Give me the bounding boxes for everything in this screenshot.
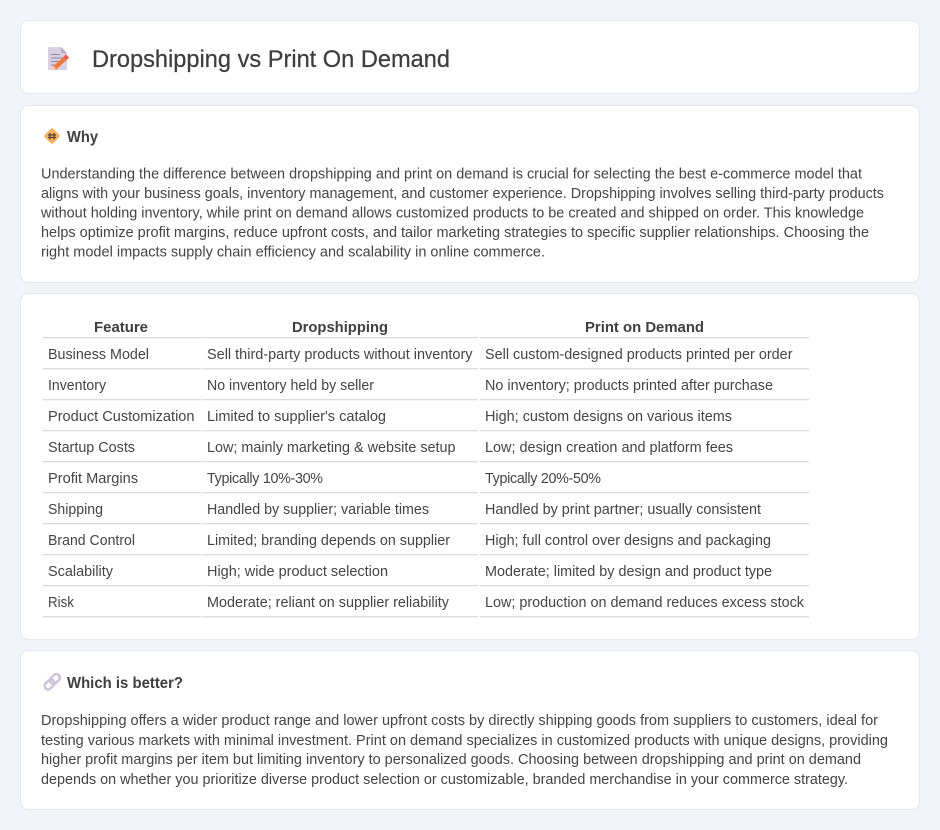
table header row: Dropshipping	[292, 319, 388, 336]
row: risk: Moderate; reliant on supplier reliability	[207, 595, 450, 611]
row: risk: Low; production on demand reduces excess stock	[485, 595, 805, 611]
row: scalability: Moderate; limited by design and product type	[485, 564, 772, 580]
row: brand control	[48, 533, 771, 549]
row: business model: Business Model	[48, 347, 149, 363]
text block: which paragraph: higher profit margins per item but limiting inventory to personalized goods. Choosing between dropshipping and print on demand	[41, 752, 861, 768]
row: scalability: Scalability	[48, 564, 114, 580]
text block: which paragraph: testing various markets with minimal investment. Print on demand specializes in customized products with unique designs, providing	[41, 733, 888, 749]
table header row: Feature	[94, 319, 148, 336]
icon: chain link	[43, 673, 61, 691]
row: product customization	[48, 409, 732, 425]
row: inventory: No inventory; products printed after purchase	[485, 378, 773, 394]
row: startup costs: Startup Costs	[48, 440, 135, 456]
row: profit margins	[48, 471, 601, 487]
text block: why paragraph: Understanding the difference between dropshipping and print on demand is crucial for selecting the best e-commerce model that	[41, 166, 862, 182]
table header row: Print on Demand	[585, 319, 704, 336]
title: Dropshipping vs Print On Demand	[92, 46, 450, 73]
text block: why paragraph: helps optimize profit margins, reduce upfront costs, and tailor marketing strategies to specific supplier relationships. Choosing the	[41, 225, 869, 241]
heading: which is better: Which is better?	[67, 675, 183, 692]
row: shipping	[48, 502, 761, 518]
row: scalability: High; wide product selection	[207, 564, 388, 580]
panel: why	[20, 106, 920, 282]
row: shipping: Handled by print partner; usually consistent	[485, 502, 761, 518]
text block: which paragraph	[41, 713, 888, 788]
icon: document with pencil	[48, 47, 68, 70]
text block: why paragraph: right model impacts supply chain efficiency and scalability in online commerce.	[41, 244, 545, 260]
panel: comparison table	[20, 294, 920, 640]
row: profit margins: Profit Margins	[48, 471, 138, 487]
row: shipping: Handled by supplier; variable times	[207, 502, 429, 518]
table header row	[94, 319, 704, 336]
text block: why paragraph	[40, 166, 884, 260]
row: inventory	[48, 378, 773, 394]
row: brand control: High; full control over designs and packaging	[485, 533, 771, 549]
row: brand control: Brand Control	[48, 533, 135, 549]
row: inventory: Inventory	[48, 378, 107, 394]
text block: which paragraph: depends on whether you prioritize diverse product selection or customizable, branded merchandise in your commerce strategy.	[41, 772, 848, 788]
row: inventory: No inventory held by seller	[207, 378, 374, 394]
text block: why paragraph: without holding inventory, while print on demand allows customized products to be created and shipped on order. This knowledge	[40, 206, 864, 222]
row: product customization: High; custom designs on various items	[485, 409, 732, 425]
row: scalability	[48, 564, 772, 580]
row: startup costs	[48, 440, 733, 456]
row: startup costs: Low; mainly marketing & website setup	[207, 440, 456, 456]
row: risk: Risk	[48, 595, 75, 611]
row: shipping: Shipping	[48, 502, 103, 518]
icon: road sign diamond	[44, 128, 60, 144]
row: business model	[48, 347, 793, 363]
row: profit margins: Typically 10%-30%	[207, 471, 323, 487]
row: business model: Sell custom-designed products printed per order	[485, 347, 793, 363]
row: profit margins: Typically 20%-50%	[485, 471, 601, 487]
heading: why: Why	[67, 129, 98, 146]
row: startup costs: Low; design creation and platform fees	[485, 440, 733, 456]
panel: header	[20, 20, 920, 94]
row: risk	[48, 595, 805, 611]
row: business model: Sell third-party products without inventory	[207, 347, 473, 363]
text block: which paragraph: Dropshipping offers a wider product range and lower upfront costs by directly shipping goods from suppliers to customers, ideal for	[41, 713, 878, 729]
text block: why paragraph: aligns with your business goals, inventory management, and customer experience. Dropshipping involves selling third-party products	[41, 186, 884, 202]
row: product customization: Product Customization	[48, 409, 195, 425]
row: product customization: Limited to supplier's catalog	[207, 409, 386, 425]
row: brand control: Limited; branding depends on supplier	[207, 533, 450, 549]
panel: which is better	[20, 650, 920, 810]
